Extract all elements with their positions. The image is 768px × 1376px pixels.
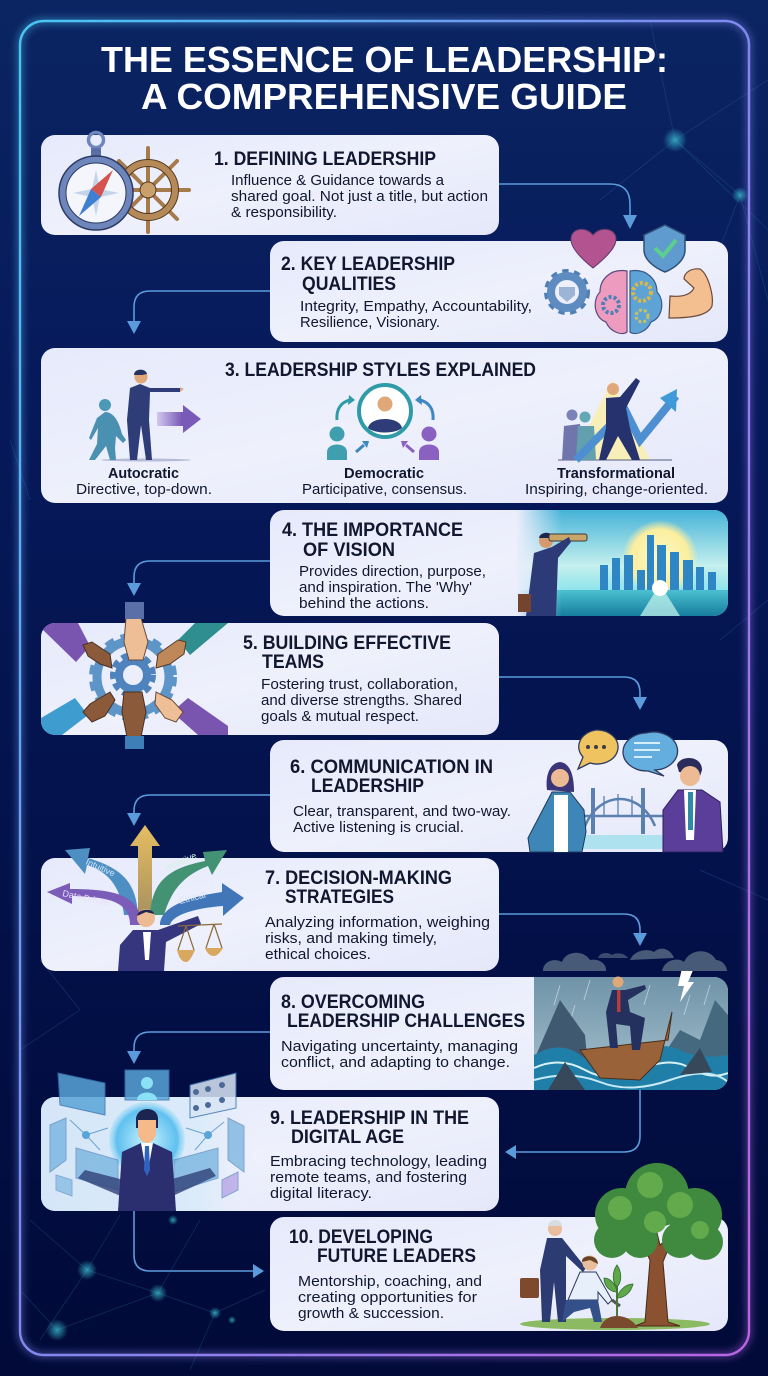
heading: STRATEGIES [285, 887, 394, 908]
description: ethical choices. [265, 946, 371, 963]
arrow: 8 to 9 right [505, 1090, 640, 1159]
arrow: 1 to 2 [499, 184, 637, 229]
heading [290, 757, 493, 797]
description: goals & mutual respect. [261, 708, 419, 725]
panel: 10 future leaders [270, 1163, 728, 1331]
description: Provides direction, purpose, [299, 563, 486, 580]
heading: 8. OVERCOMING [281, 992, 425, 1013]
description: Resilience, Visionary. [300, 314, 440, 331]
label: autocratic [76, 465, 212, 498]
heading [243, 633, 451, 673]
description: Navigating uncertainty, managing [281, 1038, 518, 1055]
label: transformational: Transformational [557, 465, 675, 482]
icon: ship wheel [106, 148, 189, 232]
description [300, 298, 532, 331]
heading [281, 992, 525, 1032]
arrow: 9 to 10 [134, 1211, 264, 1278]
icon: autocratic [89, 370, 201, 462]
heading [265, 868, 452, 908]
image: city skyline and leader [517, 510, 728, 616]
description: growth & succession. [298, 1305, 444, 1322]
figure: leader [118, 1109, 176, 1211]
label: democratic [302, 465, 467, 498]
icon: gear [547, 272, 587, 312]
heading: 2. KEY LEADERSHIP [281, 254, 455, 275]
arrow: 4 to 5 [127, 561, 270, 596]
heading: TEAMS [262, 652, 324, 673]
description [270, 1153, 487, 1202]
icon: flexed arm [669, 269, 712, 318]
heading: 10. DEVELOPING [289, 1227, 433, 1248]
heading: 7. DECISION-MAKING [265, 868, 452, 889]
description: risks, and making timely, [265, 930, 437, 947]
description [231, 172, 488, 221]
figure: mentor [520, 1220, 586, 1322]
icon: compass [59, 132, 133, 230]
heading [282, 520, 463, 561]
panel: 5 building effective teams [41, 602, 499, 749]
arrow: 2 to 3 [127, 291, 270, 334]
icon: speech bubbles [578, 730, 678, 776]
arrow: 5 to 6 [499, 677, 647, 710]
description: and inspiration. The 'Why' [299, 579, 472, 596]
description [281, 1038, 518, 1071]
label: transformational [525, 465, 708, 498]
icon: brain [595, 271, 662, 334]
figure: man [663, 758, 723, 852]
icon: democratic [327, 385, 439, 460]
figure: leader with scales [118, 909, 223, 971]
heading: LEADERSHIP CHALLENGES [287, 1011, 525, 1032]
description [293, 803, 511, 836]
description: Influence & Guidance towards a [231, 172, 445, 189]
description [298, 1273, 482, 1322]
icon: decision arrows: Initiative [164, 850, 198, 873]
heading: DIGITAL AGE [291, 1127, 404, 1148]
description [261, 676, 462, 725]
description [299, 563, 486, 612]
heading: QUALITIES [302, 274, 396, 295]
heading [281, 254, 455, 295]
description: Clear, transparent, and two-way. [293, 803, 511, 820]
icon: heart [571, 229, 616, 268]
label: democratic: Democratic [344, 465, 424, 482]
description: digital literacy. [270, 1185, 372, 1202]
description: Integrity, Empathy, Accountability, [300, 298, 532, 315]
arrow: 7 to 8 [499, 914, 647, 946]
heading: OF VISION [303, 540, 395, 561]
description: behind the actions. [299, 595, 429, 612]
heading: 6. COMMUNICATION IN [290, 757, 493, 778]
description: shared goal. Not just a title, but action [231, 188, 488, 205]
label: autocratic: Directive, top-down. [76, 481, 212, 498]
title [101, 39, 668, 117]
icon: storm clouds [543, 949, 727, 971]
arrow: 6 to 7 [127, 795, 270, 826]
icon: shield [644, 225, 685, 272]
heading [270, 1108, 469, 1148]
label: transformational: Inspiring, change-oriented. [525, 481, 708, 498]
description: Analyzing information, weighing [265, 914, 490, 931]
label: autocratic: Autocratic [108, 465, 179, 482]
description [265, 914, 490, 963]
label: democratic: Participative, consensus. [302, 481, 467, 498]
image: holographic screens [41, 1070, 256, 1211]
panel: 8 overcoming challenges [270, 949, 728, 1090]
description: & responsibility. [231, 204, 337, 221]
description: Fostering trust, collaboration, [261, 676, 458, 693]
icon: decision arrows: Data Driven [62, 888, 110, 908]
panel: 7 decision-making [41, 825, 499, 971]
icon: decision arrows [47, 825, 244, 925]
description: conflict, and adapting to change. [281, 1054, 510, 1071]
panel: 9 digital age [41, 1070, 499, 1211]
heading: 3. LEADERSHIP STYLES EXPLAINED [225, 360, 536, 381]
image: storm scene [534, 968, 728, 1090]
description: remote teams, and fostering [270, 1169, 467, 1186]
heading: 4. THE IMPORTANCE [282, 520, 463, 541]
panel: 6 communication [270, 730, 728, 852]
icon: ground [520, 1318, 710, 1330]
description: creating opportunities for [298, 1289, 477, 1306]
title: A COMPREHENSIVE GUIDE [141, 76, 627, 117]
arrow: 8 to 9 left [127, 1032, 270, 1064]
heading: 5. BUILDING EFFECTIVE [243, 633, 451, 654]
icon: decision arrows: Ethical [178, 890, 207, 906]
icon: transformational [558, 378, 677, 460]
panel: 2 key leadership qualities [270, 225, 728, 342]
title: THE ESSENCE OF LEADERSHIP: [101, 39, 668, 80]
icon: sapling [600, 1265, 638, 1328]
panel: 3 leadership styles [41, 348, 728, 503]
panel: 1 defining leadership [41, 132, 499, 235]
description: Active listening is crucial. [293, 819, 464, 836]
icon: tree [594, 1163, 723, 1326]
heading [289, 1227, 476, 1267]
description: Embracing technology, leading [270, 1153, 487, 1170]
icon: gears and hands [41, 602, 228, 749]
figure: man with telescope [518, 533, 587, 616]
figure: kneeling young leader [562, 1256, 620, 1322]
description: and diverse strengths. Shared [261, 692, 462, 709]
icon: bridge [570, 788, 670, 849]
icon: decision arrows: Intuitive [84, 857, 117, 878]
heading: 9. LEADERSHIP IN THE [270, 1108, 469, 1129]
heading: FUTURE LEADERS [317, 1246, 476, 1267]
figure: woman [528, 762, 586, 852]
description: Mentorship, coaching, and [298, 1273, 482, 1290]
heading: LEADERSHIP [311, 776, 424, 797]
panel: 4 importance of vision [270, 510, 728, 616]
heading: 1. DEFINING LEADERSHIP [214, 149, 436, 170]
